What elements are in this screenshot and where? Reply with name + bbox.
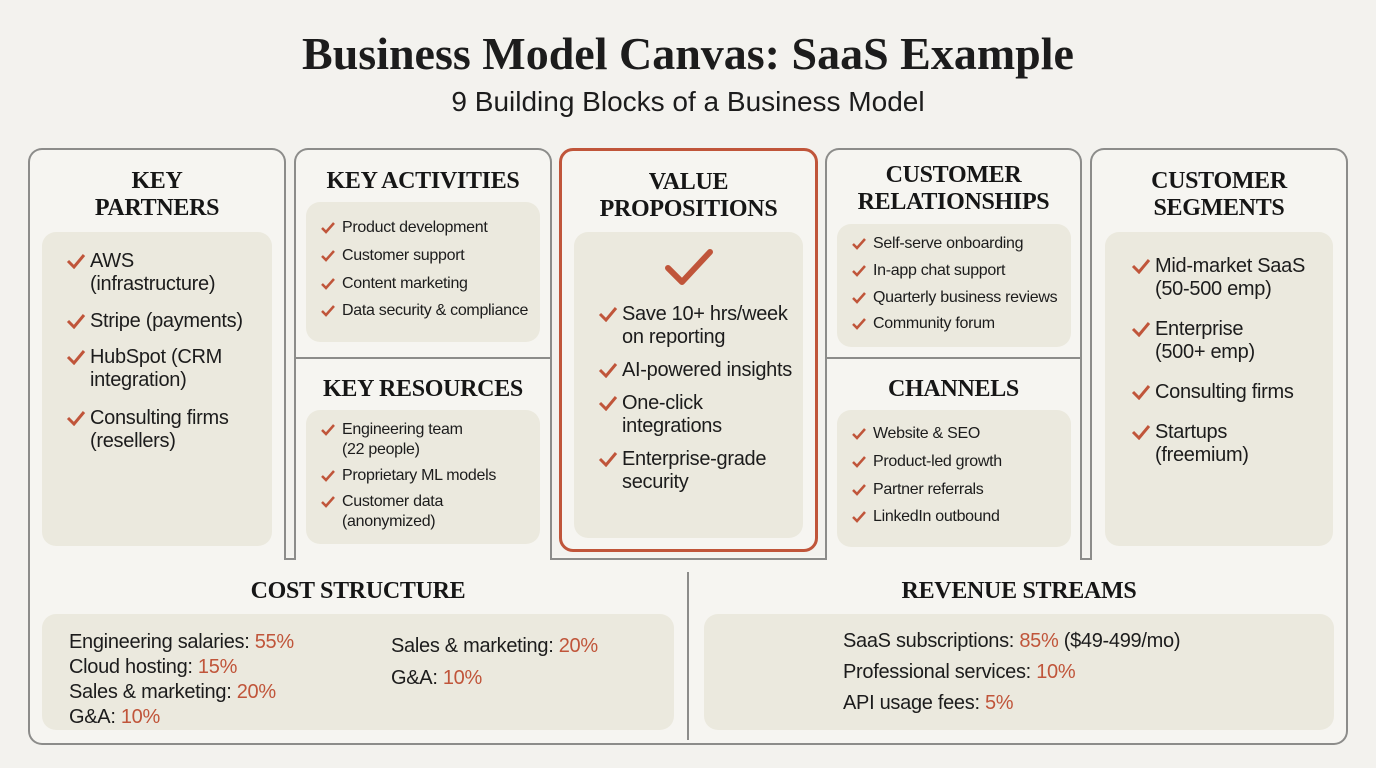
panel: customer segments <box>1090 148 1348 560</box>
list: channels: Website & SEO <box>873 425 980 442</box>
list: key partners: (resellers) <box>90 430 176 452</box>
heading: key partners: KEY <box>131 168 183 194</box>
list: key activities: Product development <box>342 219 488 236</box>
list: customer segments: (50-500 emp) <box>1155 278 1271 300</box>
heading: revenue streams: REVENUE STREAMS <box>902 578 1136 604</box>
list: key resources: Engineering team <box>342 421 463 438</box>
list: value propositions <box>574 232 803 538</box>
panel: revenue streams: API usage fees: 5% <box>843 692 1013 714</box>
heading: customer segments: CUSTOMER <box>1151 168 1287 194</box>
list: value propositions: Save 10+ hrs/week <box>622 303 788 325</box>
panel: cost structure: Sales & marketing: 20% <box>391 635 598 657</box>
list: key partners: Stripe (payments) <box>90 310 243 332</box>
list: customer relationships: Self-serve onboarding <box>873 235 1023 252</box>
panel: key partners <box>28 148 286 560</box>
list: customer segments <box>1105 232 1333 546</box>
panel: cost structure: Engineering salaries: 55% <box>69 631 294 653</box>
panel: value propositions <box>559 148 818 552</box>
list: customer relationships: Quarterly business reviews <box>873 289 1057 306</box>
list: customer segments: Enterprise <box>1155 318 1243 340</box>
list: key resources: Proprietary ML models <box>342 467 496 484</box>
subtitle: 9 Building Blocks of a Business Model <box>451 86 925 117</box>
list: value propositions: One-click <box>622 392 703 414</box>
panel: cost structure: Cloud hosting: 15% <box>69 656 237 678</box>
list: value propositions: Enterprise-grade <box>622 448 766 470</box>
list: key partners: AWS <box>90 250 134 272</box>
icon: big check <box>665 249 713 285</box>
panel: cost structure: G&A: 10% <box>391 667 482 689</box>
list: customer segments: Consulting firms <box>1155 381 1294 403</box>
panel: revenue streams: SaaS subscriptions: 85% ($49-499/mo) <box>843 630 1180 652</box>
heading: value propositions: VALUE <box>649 169 728 195</box>
list: key resources: Customer data <box>342 493 443 510</box>
heading: customer relationships: RELATIONSHIPS <box>858 189 1049 215</box>
list: value propositions: on reporting <box>622 326 725 348</box>
list: customer relationships <box>837 224 1071 347</box>
list: channels: Product-led growth <box>873 453 1002 470</box>
list: key activities: Customer support <box>342 247 464 264</box>
list: customer segments: (500+ emp) <box>1155 341 1255 363</box>
heading: customer relationships: CUSTOMER <box>886 162 1021 188</box>
list: key activities: Content marketing <box>342 275 468 292</box>
panel: key activities & resources <box>294 148 552 560</box>
list: customer relationships: Community forum <box>873 315 995 332</box>
list: value propositions: AI-powered insights <box>622 359 792 381</box>
heading: key resources: KEY RESOURCES <box>323 376 523 402</box>
list: customer segments: Mid-market SaaS <box>1155 255 1305 277</box>
panel: cost structure: Sales & marketing: 20% <box>69 681 276 703</box>
list: key partners: HubSpot (CRM <box>90 346 222 368</box>
heading: customer relationships <box>858 162 1049 215</box>
panel: cost structure <box>42 614 674 730</box>
list: key partners: Consulting firms <box>90 407 229 429</box>
heading: customer segments: SEGMENTS <box>1154 195 1284 221</box>
heading: key activities: KEY ACTIVITIES <box>326 168 519 194</box>
list: value propositions: security <box>622 471 689 493</box>
list: key resources: (22 people) <box>342 441 420 458</box>
list: channels: LinkedIn outbound <box>873 508 1000 525</box>
heading: key partners <box>95 168 219 221</box>
list: channels: Partner referrals <box>873 481 984 498</box>
list: key partners: (infrastructure) <box>90 273 215 295</box>
panel: customer relationships & channels <box>825 148 1082 560</box>
heading: value propositions: PROPOSITIONS <box>600 196 777 222</box>
list: customer relationships: In-app chat support <box>873 262 1005 279</box>
bottom frame <box>28 556 1348 745</box>
list: value propositions: integrations <box>622 415 722 437</box>
panel: cost structure: G&A: 10% <box>69 706 160 728</box>
heading: key partners: PARTNERS <box>95 195 219 221</box>
heading: customer segments <box>1151 168 1288 221</box>
title: Business Model Canvas: SaaS Example <box>302 28 1074 79</box>
heading: value propositions <box>600 169 777 222</box>
heading: cost structure: COST STRUCTURE <box>251 578 465 604</box>
list: key activities: Data security & compliance <box>342 302 528 319</box>
list: key resources <box>306 410 540 544</box>
list: key resources: (anonymized) <box>342 513 435 530</box>
panel: revenue streams: Professional services: 10% <box>843 661 1075 683</box>
list: key partners <box>42 232 272 546</box>
list: customer segments: (freemium) <box>1155 444 1249 466</box>
list: key partners: integration) <box>90 369 186 391</box>
panel: revenue streams <box>704 614 1334 730</box>
list: customer segments: Startups <box>1155 421 1227 443</box>
list: channels <box>837 410 1071 547</box>
heading: channels: CHANNELS <box>888 376 1019 402</box>
list: key activities <box>306 202 540 342</box>
